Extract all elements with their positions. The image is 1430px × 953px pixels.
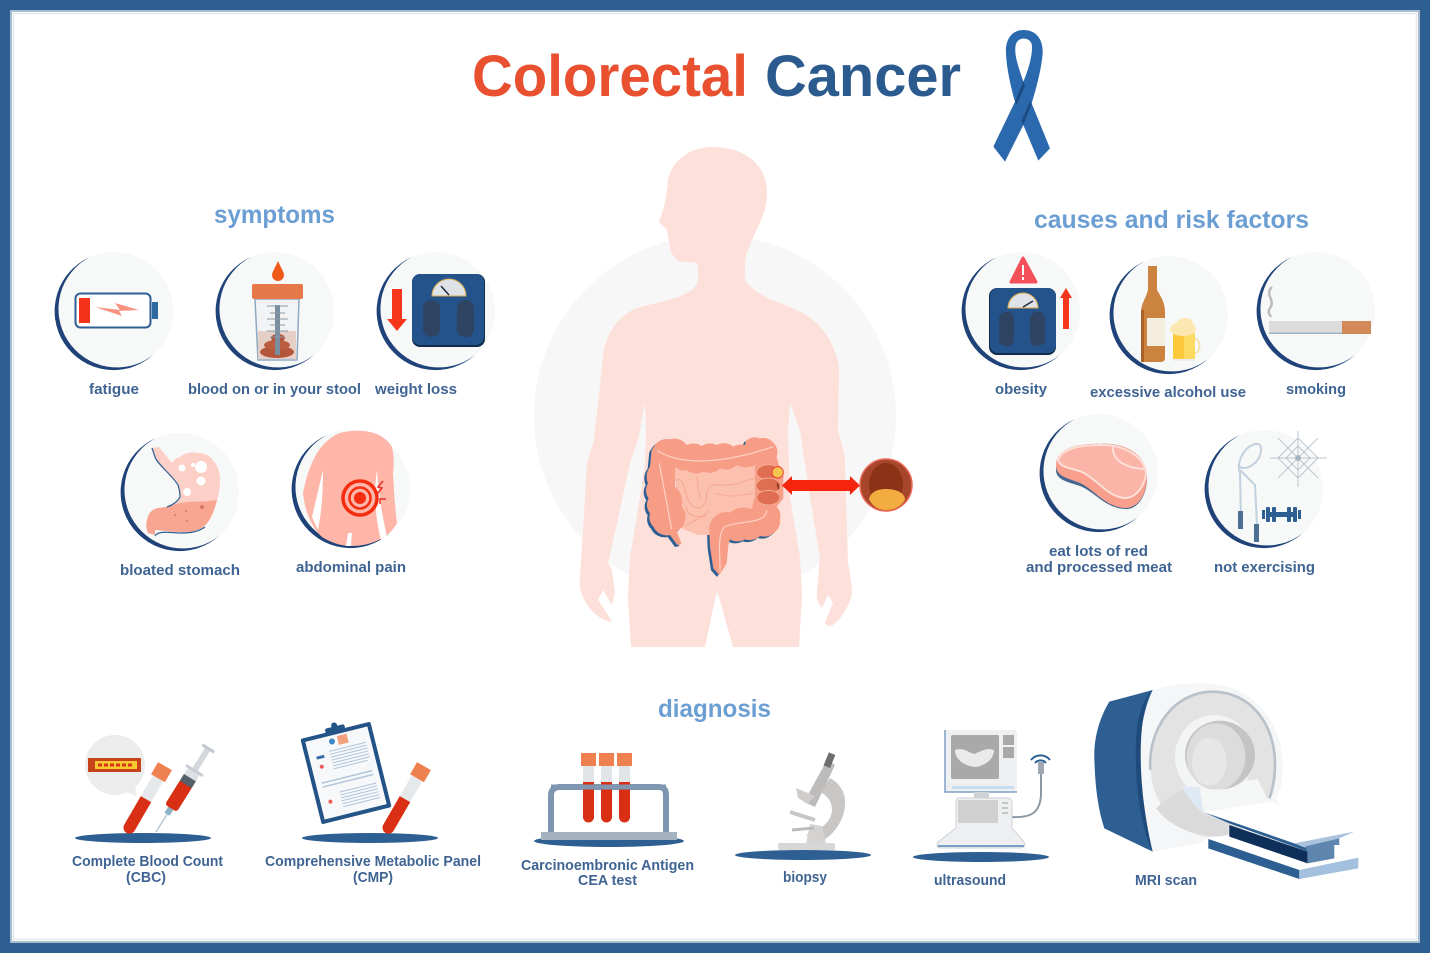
label: smoking [1286, 381, 1346, 398]
label: blood on or in your stool [188, 381, 361, 398]
panel: blood in stool [188, 252, 361, 398]
panel: abdominal pain [292, 430, 410, 576]
tumour close-up [860, 459, 912, 511]
icon: clipboard and tube [298, 714, 438, 843]
title: Colorectal [472, 44, 748, 109]
label: MRI scan [1135, 872, 1197, 889]
label: abdominal pain [296, 559, 406, 576]
label: (CMP) [353, 869, 393, 886]
label: biopsy [783, 869, 828, 886]
label [521, 857, 694, 889]
panel: red and processed meat [1026, 414, 1172, 576]
panel: CEA test [521, 753, 694, 889]
small intestine [673, 463, 757, 535]
panel: weight loss [374, 252, 495, 398]
label: Complete Blood Count [72, 853, 223, 870]
icon: torso with pain target [303, 431, 397, 546]
label: CEA test [578, 872, 637, 889]
label: not exercising [1214, 559, 1315, 576]
icon: arrow down and scale [387, 274, 485, 347]
icon: jump rope, web and dumbbell [1238, 431, 1327, 542]
panel: obesity [962, 252, 1080, 398]
label: weight loss [374, 381, 457, 398]
icon: stomach [146, 447, 220, 536]
heading: causes and risk factors: causes and risk factors [1034, 206, 1309, 234]
panel: excessive alcohol use [1090, 256, 1246, 401]
icon: steak [1056, 444, 1147, 509]
label [72, 853, 223, 886]
panel: comprehensive metabolic panel [265, 714, 481, 886]
title: Cancer [765, 44, 961, 109]
label: Comprehensive Metabolic Panel [265, 853, 481, 870]
label [265, 853, 481, 886]
title [472, 44, 961, 109]
label: eat lots of red [1049, 543, 1148, 560]
label: (CBC) [126, 869, 166, 886]
panel: not exercising [1205, 430, 1327, 576]
icon: low battery [76, 294, 158, 328]
label: and processed meat [1026, 559, 1172, 576]
tumour segments [756, 465, 781, 505]
panel: bloated stomach [120, 433, 240, 579]
icon: ultrasound machine [913, 730, 1050, 862]
label: fatigue [89, 381, 139, 398]
icon: cigarette [1269, 287, 1371, 334]
colon blue edge [644, 439, 781, 577]
icon: MRI scanner [1094, 683, 1358, 879]
label: bloated stomach [120, 562, 240, 579]
label: obesity [995, 381, 1048, 398]
label: excessive alcohol use [1090, 384, 1246, 401]
label: Carcinoembronic Antigen [521, 857, 694, 874]
panel: MRI scan [1094, 683, 1358, 889]
panel: smoking [1257, 252, 1375, 398]
body silhouette illustration [534, 147, 912, 647]
icon: specimen cup [252, 261, 303, 360]
panel: ultrasound [913, 730, 1050, 889]
label: ultrasound [934, 872, 1006, 889]
icon: blood vessel bubble, tube and syringe [75, 735, 217, 843]
heading: diagnosis: diagnosis [658, 695, 771, 723]
panel: complete blood count [72, 735, 223, 886]
icon: awareness ribbon [993, 30, 1050, 162]
colon body [646, 437, 783, 575]
icon: warning and scale [989, 258, 1072, 355]
heading: symptoms: symptoms [214, 201, 335, 229]
arrow [782, 476, 860, 495]
icon: test tube rack [534, 753, 684, 847]
panel: fatigue [55, 252, 173, 398]
label [1026, 543, 1172, 576]
icon: bottle and beer [1141, 266, 1200, 362]
panel: biopsy [735, 752, 871, 886]
icon: microscope [735, 752, 871, 860]
colon illustration [644, 437, 783, 577]
